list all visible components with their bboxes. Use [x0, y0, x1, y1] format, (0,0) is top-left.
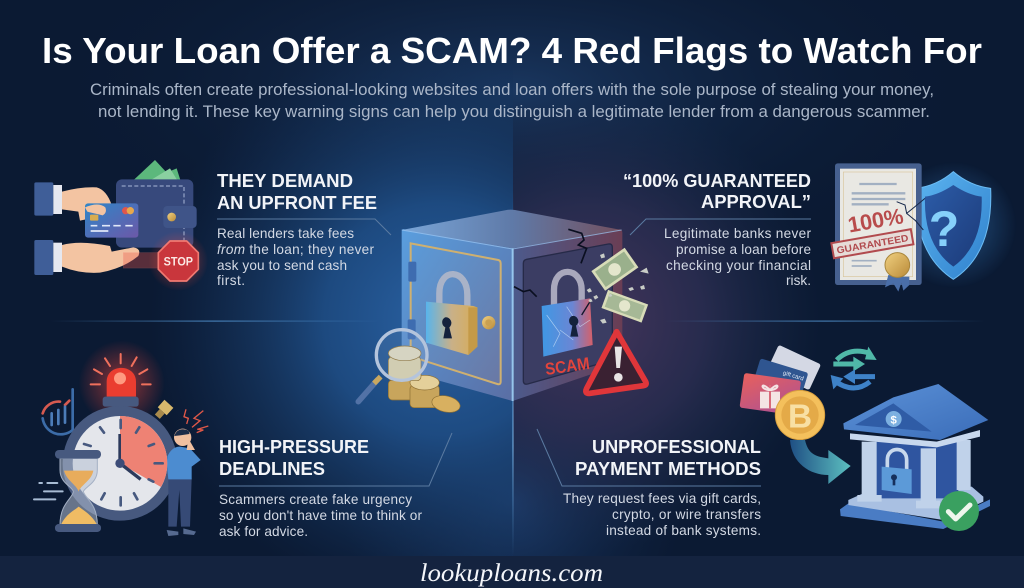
- heading: upfront fee: [217, 170, 377, 213]
- footer url: lookuploans.com: [420, 560, 603, 587]
- lower hand: [34, 240, 139, 275]
- hourglass: [55, 450, 101, 532]
- body: payment methods: They request fees via gift cards,: [563, 491, 761, 506]
- glowing shield: ?: [929, 201, 959, 257]
- cracks: [897, 198, 925, 230]
- banknotes: [587, 248, 649, 324]
- body: deadlines: so you don't have time to think or: [219, 508, 422, 523]
- speed lines: [34, 483, 63, 499]
- footer band: [0, 556, 1024, 588]
- body: upfront fee: from the loan; they never: [217, 242, 374, 257]
- stopwatch: [63, 400, 177, 521]
- body: upfront fee: ask you to send cash: [217, 258, 347, 273]
- intro text: [90, 80, 934, 121]
- secure padlock: [426, 274, 477, 355]
- bank padlock: [882, 449, 912, 494]
- heading: guaranteed approval: APPROVAL”: [701, 191, 811, 212]
- body: guaranteed approval: risk.: [786, 273, 811, 288]
- body: guaranteed approval: [664, 226, 811, 288]
- body: deadlines: [219, 492, 422, 539]
- siren light: [78, 340, 165, 427]
- stress bolts: [184, 409, 208, 433]
- icon: guaranteed certificate and shield: [831, 162, 1017, 292]
- safe right face: [513, 229, 622, 401]
- ribbon seal: [885, 253, 910, 292]
- body: guaranteed approval: promise a loan before: [676, 242, 811, 257]
- stop sign: [123, 231, 208, 291]
- heading: deadlines: HIGH-PRESSURE: [219, 436, 369, 457]
- heading: deadlines: [219, 436, 369, 479]
- right door: [523, 244, 612, 384]
- stop sign: STOP: [164, 255, 193, 268]
- panel: upfront fee text: [217, 170, 391, 288]
- icon: central safe: [358, 210, 649, 415]
- icon: payment cards, bitcoin and bank: [739, 345, 990, 531]
- bitcoin coin: B: [788, 398, 812, 435]
- glowing shield: [890, 162, 1017, 288]
- left door: [411, 243, 501, 384]
- panel: guaranteed approval text: [623, 170, 811, 288]
- intro text: Criminals often create professional-looking websites and loan offers with the sole purpose of stealing your money,: [90, 80, 934, 99]
- scam label: SCAM: [544, 354, 591, 379]
- heading: guaranteed approval: [623, 170, 811, 212]
- body: deadlines: Scammers create fake urgency: [219, 492, 412, 507]
- heading: payment methods: PAYMENT METHODS: [575, 458, 761, 479]
- body: guaranteed approval: Legitimate banks never: [664, 226, 811, 241]
- bank card: [85, 203, 138, 238]
- heading: upfront fee: THEY DEMAND: [217, 170, 353, 191]
- body: payment methods: [563, 491, 761, 538]
- title: Is Your Loan Offer a SCAM? 4 Red Flags to Watch For: [42, 30, 982, 71]
- panel: high-pressure deadlines text: [219, 433, 452, 539]
- heading: guaranteed approval: “100% GUARANTEED: [623, 170, 811, 191]
- stressed person: [167, 429, 201, 536]
- intro text: not lending it. These key warning signs can help you distinguish a legitimate lender from a dangerous scammer.: [98, 102, 930, 121]
- body: deadlines: ask for advice.: [219, 524, 308, 539]
- cash: [128, 160, 183, 187]
- wallet: [116, 179, 193, 248]
- guaranteed stamp: GUARANTEED: [836, 233, 909, 257]
- gift cards: [739, 345, 821, 416]
- icon: stopwatch, hourglass and stressed person: [34, 340, 208, 536]
- broken padlock: [542, 272, 593, 357]
- green check badge: [939, 491, 979, 531]
- certificate: [831, 163, 922, 292]
- heading: upfront fee: AN UPFRONT FEE: [217, 192, 377, 213]
- heading: deadlines: DEADLINES: [219, 458, 325, 479]
- body: upfront fee: [217, 226, 374, 288]
- safe top face: [402, 210, 622, 248]
- heading: payment methods: UNPROFESSIONAL: [592, 436, 761, 457]
- body: upfront fee: Real lenders take fees: [217, 226, 354, 241]
- icon: wallet, hands and stop sign: [34, 160, 208, 291]
- body: upfront fee: first.: [217, 273, 245, 288]
- magnifier and coins: [358, 330, 462, 415]
- bank: $: [891, 414, 898, 426]
- body: guaranteed approval: checking your financial: [666, 258, 811, 273]
- 100% text: 100%: [846, 203, 905, 238]
- bitcoin coin: [775, 390, 825, 440]
- exchange arrows: [831, 347, 877, 389]
- chart icon: [43, 389, 73, 434]
- bank: [840, 384, 990, 531]
- crack lines: [514, 229, 587, 297]
- upper hand: [34, 182, 112, 221]
- panel: unprofessional payment text: [537, 429, 761, 538]
- gift cards: gift card: [782, 371, 804, 382]
- safe left face: [402, 229, 513, 401]
- body: payment methods: instead of bank systems.: [606, 523, 761, 538]
- warning triangle: [586, 332, 646, 393]
- heading: payment methods: [575, 436, 761, 479]
- body: payment methods: crypto, or wire transfers: [612, 507, 761, 522]
- curved arrow: [790, 440, 851, 484]
